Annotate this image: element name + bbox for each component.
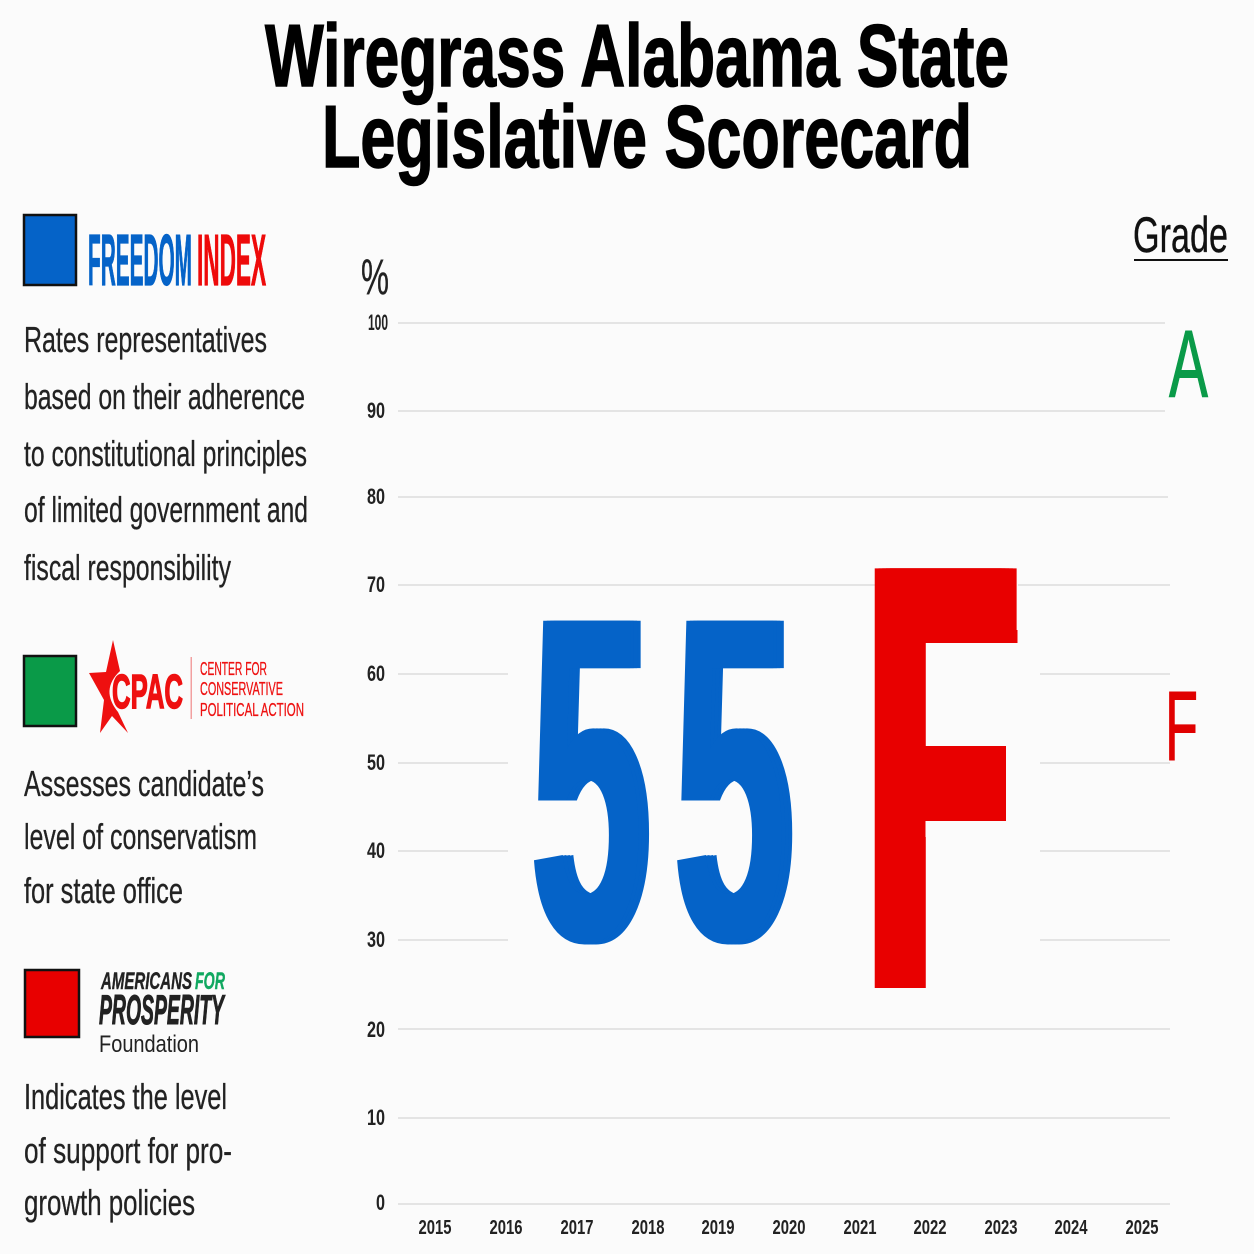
title: Legislative Scorecard xyxy=(322,87,972,186)
icon: red legend swatch xyxy=(25,970,79,1037)
panel: Freedom Index legend: FREEDOM xyxy=(88,221,192,301)
text: Freedom Index description: to constitutional principles xyxy=(24,433,307,474)
y axis labels: 0 xyxy=(376,1190,385,1215)
text: Freedom Index description xyxy=(24,319,308,588)
logo: Americans for Prosperity Foundation: Foundation xyxy=(99,1031,199,1058)
text: PROSPERITY xyxy=(99,986,226,1033)
text: Freedom Index description: Rates representatives xyxy=(24,319,267,360)
x axis labels: 2017 xyxy=(560,1217,594,1239)
grade A: A xyxy=(1169,311,1208,418)
x axis labels: 2016 xyxy=(490,1217,522,1239)
x axis labels xyxy=(418,1217,1158,1239)
logo: CPAC: CONSERVATIVE xyxy=(200,679,283,699)
logo: CPAC: CENTER FOR xyxy=(200,659,267,679)
panel: Freedom Index legend xyxy=(24,215,308,588)
x axis labels: 2019 xyxy=(702,1217,734,1239)
text: CPAC description: for state office xyxy=(24,870,183,911)
panel: Americans for Prosperity legend xyxy=(24,968,232,1223)
y axis labels: 90 xyxy=(367,398,385,423)
text: CPAC description xyxy=(24,763,264,911)
text: Freedom Index description: of limited government and xyxy=(24,489,308,530)
x axis labels: 2021 xyxy=(844,1217,876,1239)
icon: green legend swatch xyxy=(24,656,76,726)
x axis labels: 2023 xyxy=(984,1217,1018,1239)
chart: scorecard xyxy=(361,249,1170,1239)
y axis labels: 70 xyxy=(367,572,385,597)
logo: Americans for Prosperity Foundation: FOR xyxy=(195,968,225,995)
y axis labels: 50 xyxy=(367,750,385,775)
logo: Freedom Index xyxy=(88,221,266,301)
title xyxy=(265,6,1009,186)
y axis labels: 30 xyxy=(367,927,385,952)
y axis unit: % xyxy=(361,249,389,305)
x axis labels: 2020 xyxy=(772,1217,806,1239)
x axis labels: 2024 xyxy=(1054,1217,1088,1239)
logo: CPAC xyxy=(89,640,304,733)
text: CPAC description: Assesses candidate’s xyxy=(24,763,264,804)
logo: CPAC: CPAC xyxy=(112,666,183,719)
x axis labels: 2015 xyxy=(418,1217,452,1239)
panel: Freedom Index legend: INDEX xyxy=(197,221,266,301)
text: AFP description: Indicates the level xyxy=(24,1076,227,1117)
y axis labels xyxy=(367,310,388,1215)
y axis labels: 20 xyxy=(367,1017,385,1042)
x axis labels: 2022 xyxy=(914,1217,946,1239)
logo: Americans for Prosperity Foundation xyxy=(99,968,226,1058)
x axis labels: 2025 xyxy=(1126,1217,1158,1239)
y axis labels: 60 xyxy=(367,661,385,686)
text: Freedom Index description: based on their adherence xyxy=(24,376,305,417)
grade column xyxy=(1133,207,1228,781)
y axis labels: 100 xyxy=(368,310,388,335)
grade F: F xyxy=(1165,671,1198,781)
y axis labels: 80 xyxy=(367,484,385,509)
x axis labels: 2018 xyxy=(632,1217,664,1239)
text: AFP description: growth policies xyxy=(24,1182,195,1223)
logo: CPAC: POLITICAL ACTION xyxy=(200,700,304,720)
logo: Americans for Prosperity Foundation: AMERICANS xyxy=(100,968,192,995)
icon: blue legend swatch xyxy=(24,215,76,285)
big grade F: F xyxy=(858,436,1011,1118)
text: AFP description xyxy=(24,1076,232,1223)
text: AFP description: of support for pro- xyxy=(24,1130,232,1171)
y axis labels: 40 xyxy=(367,838,385,863)
text: Freedom Index description: fiscal responsibility xyxy=(24,547,231,588)
text: CPAC description: level of conservatism xyxy=(24,816,257,857)
big score 55: 55 xyxy=(528,521,814,1039)
icon: red star xyxy=(89,640,128,733)
panel: CPAC legend xyxy=(24,640,304,911)
y axis labels: 10 xyxy=(367,1105,385,1130)
